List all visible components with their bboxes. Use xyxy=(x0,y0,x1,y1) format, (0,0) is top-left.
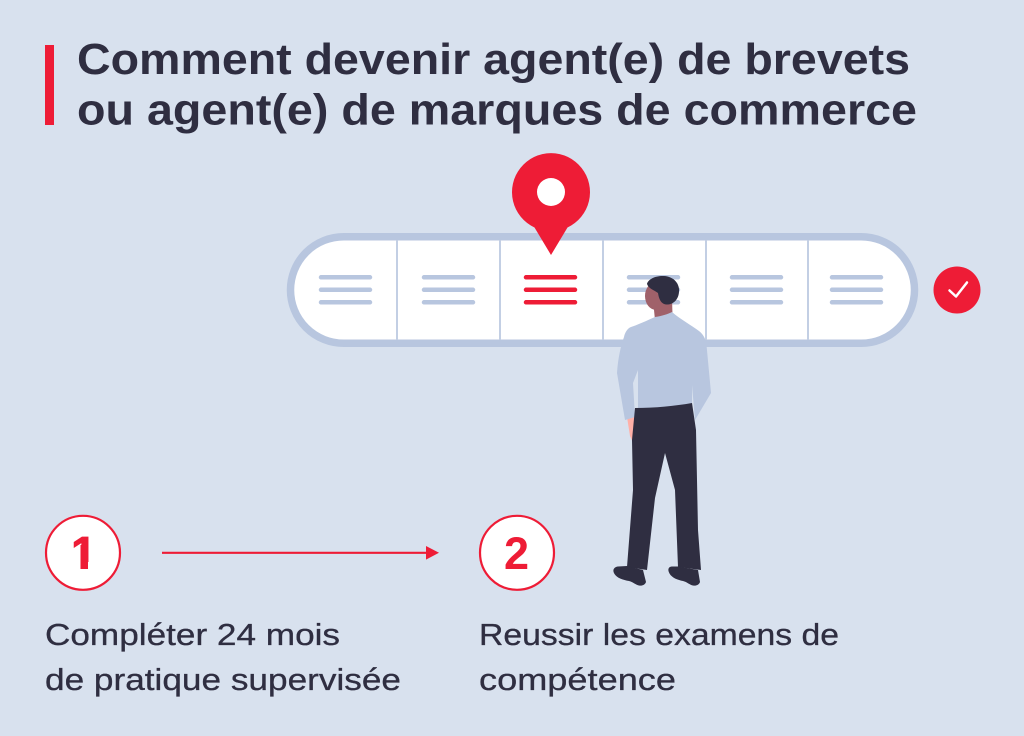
step 1 text xyxy=(45,617,401,697)
step lines: grey xyxy=(321,277,881,302)
trousers xyxy=(627,403,701,570)
hand xyxy=(627,416,636,445)
neck xyxy=(653,298,672,320)
progress bar with six steps xyxy=(290,237,914,343)
step lines: active red xyxy=(526,277,575,302)
step 2 text: Reussir les examens de xyxy=(479,617,839,652)
step dividers xyxy=(397,240,808,340)
right shoe xyxy=(668,566,700,586)
icon: location pin xyxy=(512,153,590,255)
bar pill xyxy=(290,237,914,343)
step 2 text xyxy=(479,617,839,697)
title: ou agent(e) de marques de commerce xyxy=(77,86,917,134)
step 1 number badge: 1 xyxy=(71,527,97,579)
step 2 text: compétence xyxy=(479,662,676,697)
step 1 text: de pratique supervisée xyxy=(45,662,401,697)
left shoe xyxy=(613,566,646,586)
title accent bar xyxy=(45,45,54,125)
arrow from step 1 to step 2 xyxy=(162,546,439,560)
illustration: person looking at the bar xyxy=(613,276,711,586)
step 2 number badge xyxy=(480,516,554,590)
hair xyxy=(647,276,679,305)
step 1 text: Compléter 24 mois xyxy=(45,617,340,652)
step 1 number badge xyxy=(46,516,120,590)
step 1 numeral stem xyxy=(80,545,88,569)
face xyxy=(645,282,667,310)
step 2 number badge: 2 xyxy=(504,528,529,579)
title xyxy=(77,35,917,134)
title: Comment devenir agent(e) de brevets xyxy=(77,35,910,84)
icon: check badge xyxy=(934,266,980,314)
shirt xyxy=(617,312,711,420)
